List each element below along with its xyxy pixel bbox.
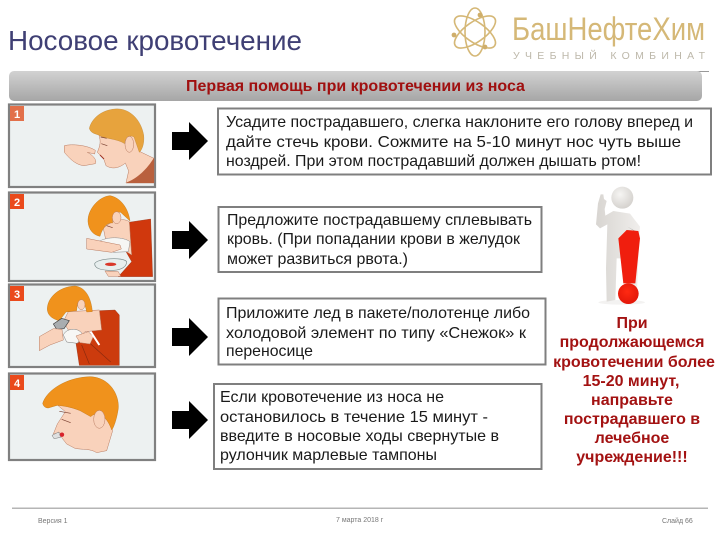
arrow 3: [172, 318, 208, 356]
text box 2: может развиться рвота.): [227, 251, 408, 268]
badge 4: [10, 375, 24, 390]
text box 1: дайте стечь крови. Сожмите на 5-10 минут нос чуть выше: [226, 134, 681, 151]
text box 2: [218, 207, 542, 272]
title: Носовое кровотечение: [8, 25, 302, 56]
callout: seek medical care: При: [616, 315, 648, 332]
arrow 2: [172, 221, 208, 259]
callout: seek medical care: лечебное: [595, 430, 669, 447]
panel: step 4 illustration: [9, 374, 155, 460]
panel: step 3 illustration: [9, 284, 155, 367]
callout: seek medical care: [553, 315, 715, 466]
logo: БашНефтеХим: [450, 8, 706, 62]
text box 4: Если кровотечение из носа не: [220, 389, 444, 406]
illustration: cold pack on nose bridge: [39, 286, 119, 365]
badge 2: 2: [14, 197, 20, 209]
text box 1: Усадите пострадавшего, слегка наклоните его голову вперед и: [226, 114, 693, 131]
badge 4: 4: [14, 378, 21, 390]
text box 4: остановилось в течение 15 минут -: [220, 409, 488, 426]
text box 3: [218, 298, 546, 364]
illustration: gauze tampon in nose: [43, 377, 118, 453]
text box 3: переносице: [226, 343, 313, 360]
footer version: Версия 1: [38, 518, 68, 525]
callout: seek medical care: направьте: [591, 392, 673, 409]
text box 4: рулончик марлевые тампоны: [220, 447, 437, 464]
badge 1: [10, 106, 24, 121]
logo subtitle: УЧЕБНЫЙ КОМБИНАТ: [513, 49, 706, 62]
text box 4: введите в носовые ходы свернутые в: [220, 428, 499, 445]
badge 1: 1: [14, 109, 20, 121]
callout: seek medical care: продолжающемся: [560, 334, 704, 351]
footer date: 7 марта 2018 г: [336, 517, 384, 524]
icon: figure with exclamation mark: [596, 187, 645, 305]
text box 1: [218, 108, 711, 174]
text box 1: ноздрей. При этом пострадавший должен дышать ртом!: [226, 153, 641, 170]
icon: atom: [450, 8, 500, 56]
footer slide number: Слайд 66: [662, 517, 693, 525]
arrow 1: [172, 122, 208, 160]
illustration: spitting into bowl: [87, 196, 153, 277]
text box 3: холодовой элемент по типу «Снежок» к: [226, 325, 527, 342]
footer: [12, 508, 708, 525]
badge 3: 3: [14, 289, 20, 301]
text box 2: Предложите пострадавшему сплевывать: [227, 212, 532, 229]
arrow 4: [172, 401, 208, 439]
callout: seek medical care: пострадавшего в: [564, 411, 700, 428]
badge 3: [10, 286, 24, 301]
text box 2: кровь. (При попадании крови в желудок: [227, 231, 521, 248]
illustration: pinching nose: [64, 109, 154, 183]
badge 2: [10, 194, 24, 209]
text box 3: Приложите лед в пакете/полотенце либо: [226, 305, 530, 322]
callout: seek medical care: кровотечении более: [553, 354, 715, 371]
banner: first aid heading: [9, 71, 709, 101]
panel: step 2 illustration: [9, 192, 155, 281]
banner heading: Первая помощь при кровотечении из носа: [186, 78, 525, 95]
panel: step 1 illustration: [9, 104, 155, 187]
callout: seek medical care: 15-20 минут,: [583, 373, 679, 390]
callout: seek medical care: учреждение!!!: [576, 449, 688, 466]
text box 4: [214, 384, 542, 469]
